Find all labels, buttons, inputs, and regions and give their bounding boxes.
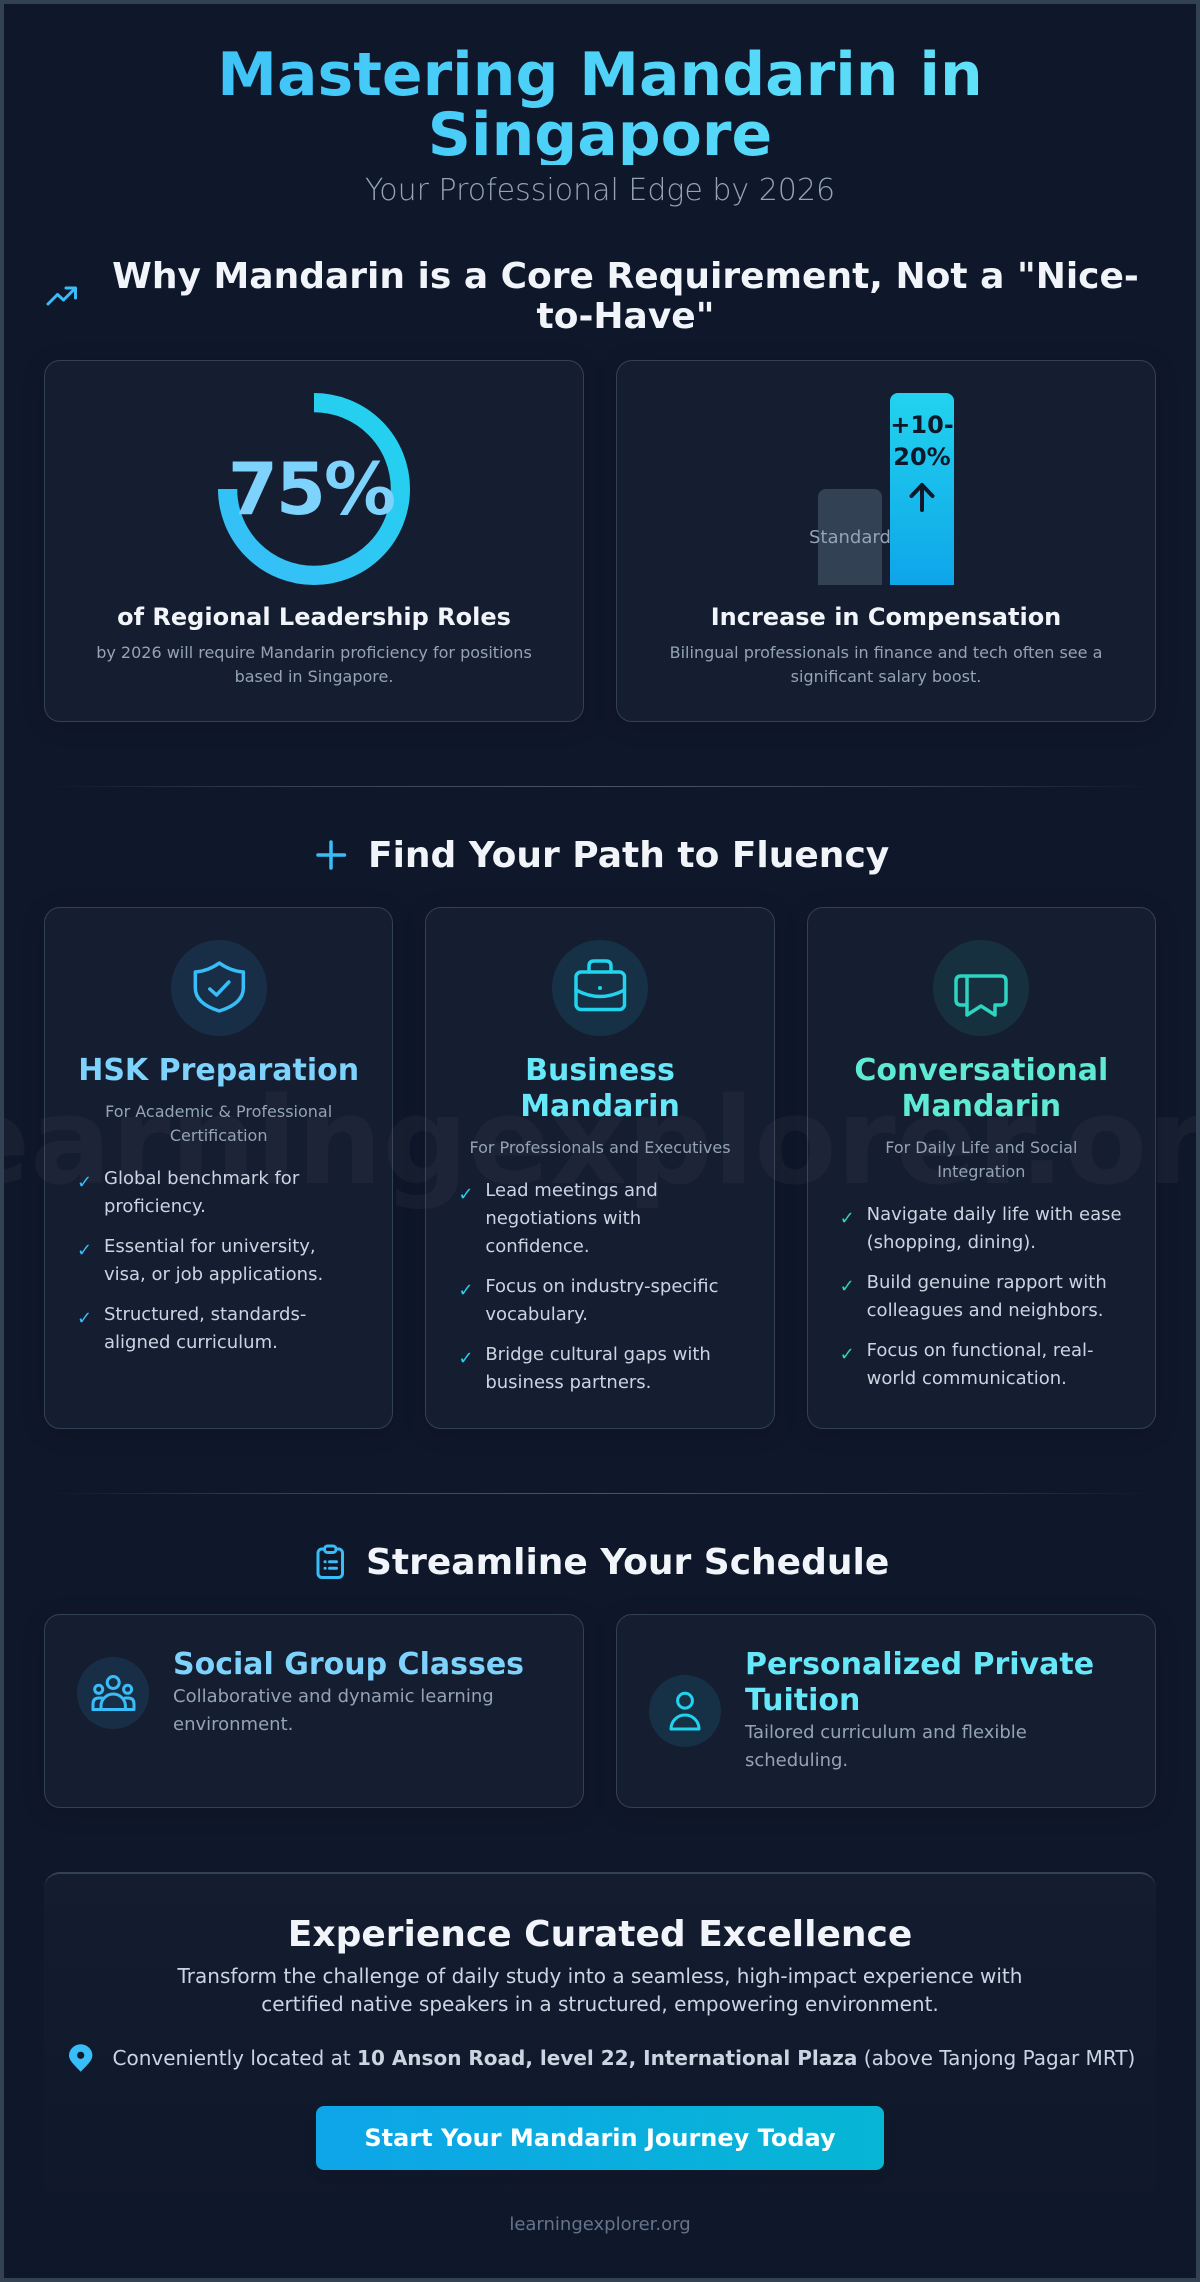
list: business benefits: Lead meetings and <box>485 1180 658 1201</box>
list: conversational benefits: colleagues and neighbors. <box>867 1300 1104 1321</box>
bar: bilingual salary <box>890 393 954 585</box>
option description: social group: environment. <box>173 1714 293 1735</box>
panel: HSK preparation <box>44 907 393 1429</box>
location line: Conveniently located at 10 Anson Road, level 22, International Plaza (above Tanjong Pagar MRT) <box>112 2046 1135 2070</box>
card subtitle: HSK: For Academic & Professional <box>105 1102 332 1121</box>
list: HSK benefits: ✓ <box>77 1308 92 1329</box>
icon: shield <box>171 940 267 1036</box>
icon: trending up <box>46 286 77 306</box>
compensation description <box>670 643 1102 686</box>
option title: private tuition: Personalized Private <box>745 1647 1094 1682</box>
card title: business mandarin: Business <box>525 1053 675 1088</box>
title: Mastering Mandarin in <box>217 40 983 110</box>
title <box>44 45 1156 165</box>
card title: conversational mandarin: Conversational <box>854 1053 1108 1088</box>
list: conversational benefits <box>840 1204 1122 1389</box>
list: conversational benefits: ✓ <box>840 1276 855 1297</box>
list: HSK benefits <box>77 1168 323 1353</box>
option description: social group <box>173 1686 494 1735</box>
donut chart: 75 percent <box>218 393 410 585</box>
card title: business mandarin <box>520 1053 680 1124</box>
list: conversational benefits: (shopping, dining). <box>867 1232 1036 1253</box>
list: business benefits: business partners. <box>485 1372 651 1393</box>
list: business benefits: ✓ <box>458 1280 473 1301</box>
benefit: ✓ <box>77 1172 92 1193</box>
bar value <box>890 411 954 471</box>
card title: business mandarin: Mandarin <box>520 1089 680 1124</box>
list: business benefits: ✓ <box>458 1348 473 1369</box>
list: HSK benefits: ✓ <box>77 1240 92 1261</box>
title: Singapore <box>428 100 772 170</box>
option description: private tuition <box>744 1722 1027 1771</box>
option title: private tuition: Tuition <box>745 1683 860 1718</box>
list: HSK benefits: visa, or job applications. <box>104 1264 323 1285</box>
list: business benefits: Bridge cultural gaps with <box>485 1344 711 1365</box>
list: business benefits: negotiations with <box>485 1208 641 1229</box>
panel: private tuition <box>616 1614 1156 1808</box>
heading: why mandarin: to-Have" <box>537 296 714 337</box>
icon: person <box>649 1675 721 1747</box>
stat number: 75% <box>228 447 394 531</box>
list: business benefits: vocabulary. <box>485 1304 588 1325</box>
card subtitle: HSK: Certification <box>170 1126 267 1145</box>
list: conversational benefits: Navigate daily life with ease <box>867 1204 1122 1225</box>
stat label: of Regional Leadership Roles <box>117 603 511 631</box>
option title: social group classes: Social Group Classes <box>173 1647 524 1682</box>
heading: curated excellence: Experience Curated Excellence <box>288 1914 912 1955</box>
list: conversational benefits: world communication. <box>867 1368 1067 1389</box>
option description: private tuition: Tailored curriculum and flexible <box>745 1722 1027 1743</box>
bar value: +10- <box>890 411 954 439</box>
list: HSK benefits: Global benchmark for <box>104 1168 299 1189</box>
compensation label: Increase in Compensation <box>711 603 1061 631</box>
list: conversational benefits: Focus on functional, real- <box>867 1340 1094 1361</box>
option description: private tuition: scheduling. <box>745 1750 848 1771</box>
icon: briefcase <box>552 940 648 1036</box>
list: HSK benefits: proficiency. <box>104 1196 206 1217</box>
card subtitle: conversational: Integration <box>937 1162 1025 1181</box>
stat description: based in Singapore. <box>235 667 393 686</box>
option title: private tuition <box>745 1647 1094 1718</box>
card subtitle: conversational <box>885 1138 1077 1181</box>
list: HSK benefits: Essential for university, <box>104 1236 316 1257</box>
benefit: ✓ <box>840 1208 855 1229</box>
option description: social group: Collaborative and dynamic learning <box>173 1686 494 1707</box>
panel: business mandarin <box>425 907 775 1429</box>
icon: location pin <box>69 2044 92 2072</box>
button: start journey: Start Your Mandarin Journey Today <box>364 2124 836 2152</box>
list: conversational benefits: ✓ <box>840 1344 855 1365</box>
cta paragraph: certified native speakers in a structured, empowering environment. <box>261 1992 939 2016</box>
panel: social group classes <box>44 1614 584 1808</box>
button: start journey <box>316 2106 884 2170</box>
bar value: 20% <box>893 443 951 471</box>
list: business benefits <box>458 1180 719 1393</box>
panel: compensation stat <box>616 360 1156 722</box>
footer: site name: learningexplorer.org <box>509 2214 691 2235</box>
compensation description: Bilingual professionals in finance and tech often see a <box>670 643 1102 662</box>
heading: why mandarin <box>112 256 1139 337</box>
icon: chat bubbles <box>933 940 1029 1036</box>
icon: plus <box>316 840 346 870</box>
list: business benefits: Focus on industry-specific <box>485 1276 719 1297</box>
heading: why mandarin: Why Mandarin is a Core Requirement, Not a "Nice- <box>112 256 1139 297</box>
list: business benefits: confidence. <box>485 1236 590 1257</box>
compensation description: significant salary boost. <box>791 667 981 686</box>
list: HSK benefits: aligned curriculum. <box>104 1332 278 1353</box>
cta paragraph <box>177 1964 1022 2016</box>
icon: clipboard <box>316 1544 344 1579</box>
icon: arrow up <box>909 482 935 512</box>
icon: group <box>77 1657 149 1729</box>
card subtitle: business: For Professionals and Executives <box>469 1138 731 1157</box>
stat description: by 2026 will require Mandarin proficiency for positions <box>96 643 532 662</box>
card title: HSK preparation: HSK Preparation <box>78 1053 359 1088</box>
heading: find your path: Find Your Path to Fluency <box>368 835 889 876</box>
panel: leadership stat <box>44 360 584 722</box>
card subtitle: conversational: For Daily Life and Social <box>885 1138 1077 1157</box>
heading: streamline schedule: Streamline Your Schedule <box>366 1542 889 1583</box>
cta paragraph: Transform the challenge of daily study into a seamless, high-impact experience with <box>178 1964 1022 1988</box>
bar label: standard: Standard <box>809 527 891 548</box>
bar: standard salary <box>818 489 882 585</box>
card title: conversational mandarin <box>854 1053 1108 1124</box>
card subtitle: HSK <box>105 1102 332 1145</box>
card title: conversational mandarin: Mandarin <box>902 1089 1061 1124</box>
benefit: ✓ <box>458 1184 473 1205</box>
list: HSK benefits: Structured, standards- <box>104 1304 306 1325</box>
stat description <box>96 643 532 686</box>
subtitle: Your Professional Edge by 2026 <box>365 173 835 208</box>
panel: conversational mandarin <box>807 907 1156 1429</box>
list: conversational benefits: Build genuine rapport with <box>867 1272 1107 1293</box>
panel: call to action <box>44 1872 1156 2218</box>
